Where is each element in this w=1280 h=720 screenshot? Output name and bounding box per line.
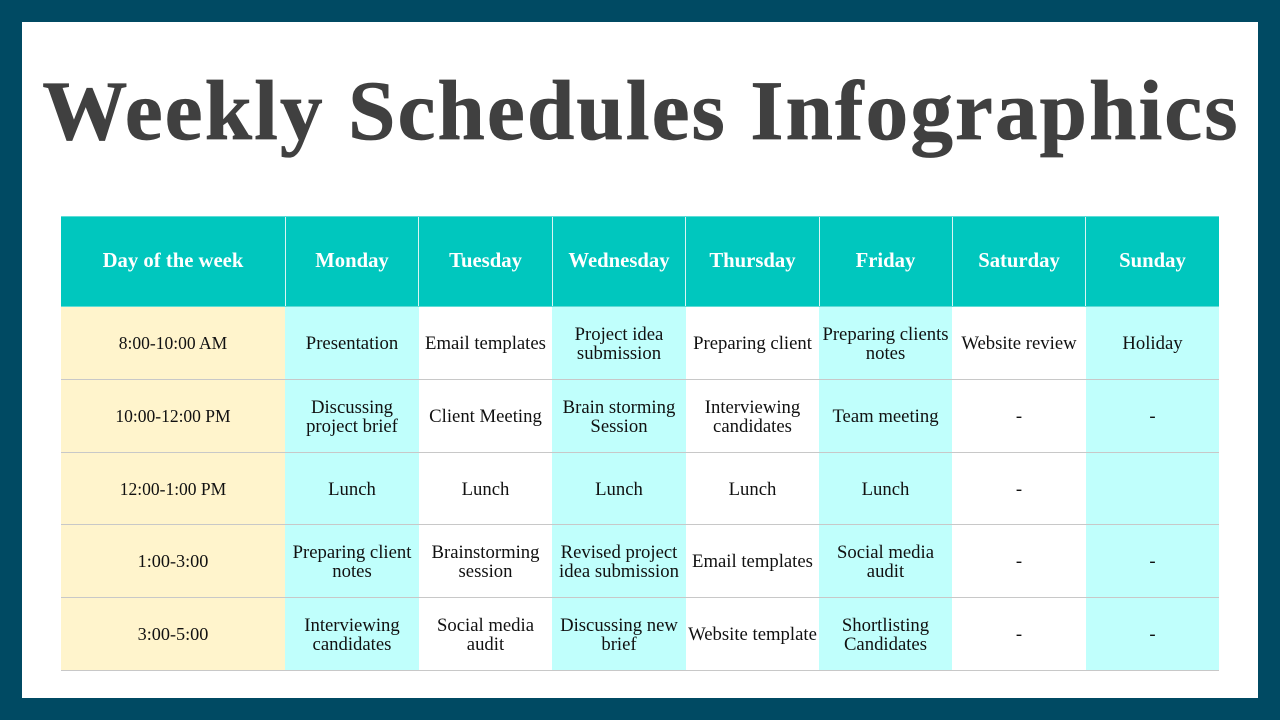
Friday 1:00	[819, 525, 952, 598]
Thursday 10:00: candidates	[713, 416, 792, 436]
Wednesday 10:00: Session	[590, 416, 648, 436]
Monday 1:00: notes	[332, 560, 372, 582]
Friday 12:00	[819, 453, 952, 525]
Wednesday 10:00: Brain storming	[563, 396, 675, 418]
header: Monday: Monday	[315, 250, 389, 272]
Wednesday 3:00: Discussing new	[560, 614, 678, 636]
Sunday 3:00: -	[1149, 624, 1156, 645]
Friday 8:00	[819, 307, 952, 380]
Tuesday 3:00: Social media	[437, 614, 534, 636]
Friday 10:00: Team meeting	[832, 406, 939, 427]
Saturday 8:00	[952, 307, 1086, 380]
Thursday 10:00: Interviewing	[705, 396, 800, 418]
Monday 3:00: candidates	[313, 634, 391, 654]
Monday 12:00	[285, 453, 419, 525]
Sunday 8:00	[1086, 307, 1219, 380]
time: 10:00-12:00 PM: 10:00-12:00 PM	[115, 406, 231, 426]
Wednesday 8:00: Project idea	[575, 324, 663, 344]
Sunday 1:00	[1086, 525, 1219, 598]
time: 1:00-3:00	[61, 525, 285, 598]
header: day of the week	[61, 216, 285, 307]
Thursday 8:00: Preparing client	[693, 333, 812, 354]
Wednesday 1:00: Revised project	[561, 542, 677, 562]
Tuesday 12:00	[419, 453, 552, 525]
header: Monday	[285, 216, 419, 307]
time: 12:00-1:00 PM	[61, 453, 285, 525]
Monday 8:00: Presentation	[306, 333, 398, 354]
time: 3:00-5:00: 3:00-5:00	[138, 624, 208, 644]
time: 1:00-3:00: 1:00-3:00	[138, 551, 208, 571]
Friday 1:00: Social media	[837, 542, 934, 562]
Sunday 1:00: -	[1149, 551, 1156, 572]
Monday 12:00: Lunch	[328, 478, 376, 500]
Friday 8:00: Preparing clients	[822, 324, 949, 344]
Sunday 8:00: Holiday	[1122, 333, 1183, 354]
Thursday 10:00	[686, 380, 819, 453]
title: Weekly Schedules Infographics	[42, 64, 1240, 158]
Tuesday 10:00	[419, 380, 552, 453]
Tuesday 8:00: Email templates	[425, 333, 546, 354]
Tuesday 1:00: session	[458, 560, 512, 582]
header: Saturday	[952, 216, 1086, 307]
header: Saturday: Saturday	[978, 250, 1060, 272]
Wednesday 12:00	[552, 453, 686, 525]
time: 12:00-1:00 PM: 12:00-1:00 PM	[120, 478, 226, 498]
time: 8:00-10:00 AM: 8:00-10:00 AM	[119, 333, 227, 353]
Saturday 10:00	[952, 380, 1086, 453]
Wednesday 10:00	[552, 380, 686, 453]
Tuesday 8:00	[419, 307, 552, 380]
time: 10:00-12:00 PM	[61, 380, 285, 453]
header: Friday: Friday	[856, 250, 915, 272]
Saturday 3:00: -	[1016, 624, 1022, 645]
Monday 1:00: Preparing client	[293, 542, 411, 562]
Friday 10:00	[819, 380, 952, 453]
Thursday 12:00: Lunch	[729, 478, 776, 500]
Monday 10:00: project brief	[306, 416, 398, 436]
header: Tuesday: Tuesday	[449, 250, 522, 272]
Thursday 1:00: Email templates	[692, 551, 813, 572]
Monday 3:00	[285, 598, 419, 671]
Saturday 3:00	[952, 598, 1086, 671]
Sunday 10:00	[1086, 380, 1219, 453]
Saturday 12:00: -	[1016, 478, 1022, 500]
Sunday 12:00	[1086, 453, 1219, 525]
Tuesday 12:00: Lunch	[462, 478, 509, 500]
Saturday 10:00: -	[1016, 406, 1022, 427]
Sunday 10:00: -	[1149, 406, 1156, 427]
Saturday 1:00: -	[1016, 551, 1022, 572]
header: day of the week: Day of the week	[103, 250, 243, 272]
header: Friday	[819, 216, 952, 307]
Monday 1:00	[285, 525, 419, 598]
header: Sunday: Sunday	[1119, 250, 1186, 272]
Tuesday 1:00	[419, 525, 552, 598]
Friday 3:00: Candidates	[844, 634, 927, 654]
Friday 3:00	[819, 598, 952, 671]
time: 8:00-10:00 AM	[61, 307, 285, 380]
Wednesday 3:00	[552, 598, 686, 671]
time: 3:00-5:00	[61, 598, 285, 671]
header: Thursday: Thursday	[709, 250, 796, 272]
Saturday 12:00	[952, 453, 1086, 525]
Wednesday 1:00: idea submission	[559, 560, 679, 582]
header: Sunday	[1086, 216, 1219, 307]
Tuesday 3:00: audit	[467, 634, 504, 654]
header: Tuesday	[419, 216, 552, 307]
Friday 12:00: Lunch	[862, 478, 909, 500]
Wednesday 12:00: Lunch	[595, 478, 643, 500]
Monday 3:00: Interviewing	[304, 614, 400, 636]
Saturday 8:00: Website review	[961, 333, 1077, 354]
Friday 3:00: Shortlisting	[842, 614, 929, 636]
Thursday 1:00	[686, 525, 819, 598]
Tuesday 1:00: Brainstorming	[432, 542, 539, 562]
Thursday 3:00	[686, 598, 819, 671]
header: Wednesday: Wednesday	[568, 250, 670, 272]
Friday 1:00: audit	[867, 560, 904, 582]
Monday 10:00: Discussing	[311, 396, 393, 418]
Monday 8:00	[285, 307, 419, 380]
Wednesday 3:00: brief	[601, 634, 637, 654]
Monday 10:00	[285, 380, 419, 453]
Wednesday 8:00	[552, 307, 686, 380]
Thursday 12:00	[686, 453, 819, 525]
header: Wednesday	[552, 216, 686, 307]
Friday 8:00: notes	[866, 342, 905, 364]
Wednesday 1:00	[552, 525, 686, 598]
Thursday 3:00: Website template	[688, 624, 817, 645]
Saturday 1:00	[952, 525, 1086, 598]
header: Thursday	[686, 216, 819, 307]
Thursday 8:00	[686, 307, 819, 380]
Tuesday 10:00: Client Meeting	[429, 406, 542, 427]
Sunday 3:00	[1086, 598, 1219, 671]
Wednesday 8:00: submission	[577, 342, 661, 364]
Tuesday 3:00	[419, 598, 552, 671]
